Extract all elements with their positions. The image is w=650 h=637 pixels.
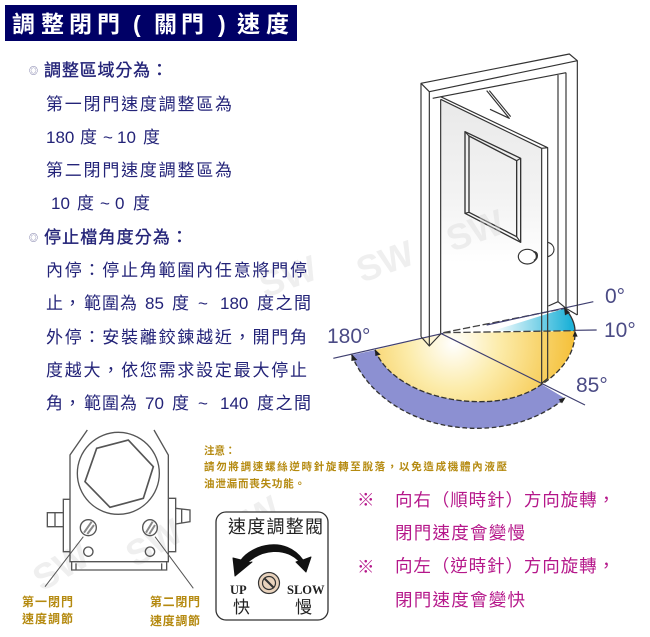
- caution note: [204, 444, 508, 490]
- direction notes: 向右（順時針）方向旋轉，: [395, 490, 615, 510]
- caution note: 請勿將調速螺絲逆時針旋轉至脫落，以免造成機體內液壓: [204, 460, 508, 473]
- direction notes: [357, 490, 615, 610]
- labels: adjusters: 速度調節: [22, 611, 73, 626]
- watermarks: SW: [26, 534, 96, 599]
- text block: stop angles: 度: [172, 294, 189, 313]
- text block: stop angles: 度之間: [257, 294, 312, 313]
- arrowheads: [351, 307, 578, 403]
- text block: adjustment zones: 度: [133, 194, 150, 213]
- direction notes: 閉門速度會變快: [395, 590, 525, 610]
- text block: adjustment zones: ~: [103, 128, 113, 147]
- speed valve panel: 快: [233, 598, 250, 617]
- door leaf shading: [441, 99, 542, 263]
- text block: stop angles: 內停：停止角範圍內任意將門停: [46, 261, 307, 280]
- labels: adjusters: 第一閉門: [22, 594, 73, 609]
- text block: stop angles: 外停：安裝離鉸鍊越近，開門角: [46, 328, 307, 347]
- speed valve panel: UP: [230, 583, 247, 597]
- closer arm: [487, 91, 511, 118]
- floor: purple outer arc: [352, 350, 565, 428]
- speed valve panel: [216, 512, 328, 620]
- text block: stop angles: 止: [46, 294, 63, 313]
- direction notes: 向左（逆時針）方向旋轉，: [395, 556, 615, 576]
- window: [465, 132, 521, 242]
- labels: adjusters: [22, 594, 200, 628]
- watermarks: SW: [351, 232, 419, 291]
- angle labels: 10°: [604, 319, 636, 342]
- knob: [518, 249, 536, 264]
- text block: adjustment zones: 180: [46, 128, 74, 147]
- text block: stop angles: 140: [220, 394, 248, 413]
- speed valve panel: SLOW: [287, 583, 325, 597]
- text block: stop angles: ◎: [29, 233, 38, 243]
- text block: adjustment zones: 10: [117, 128, 136, 147]
- text block: stop angles: ~: [198, 294, 208, 313]
- text block: stop angles: 停止檔角度分為：: [44, 228, 188, 247]
- text block: adjustment zones: ◎: [29, 66, 38, 76]
- icon: adjuster knob: [258, 572, 280, 594]
- door edges: [441, 97, 548, 383]
- floor: cyan closing sector: [493, 308, 575, 331]
- watermarks: [26, 201, 509, 599]
- text block: stop angles: 範圍為: [84, 394, 138, 413]
- direction notes: ※: [357, 557, 374, 577]
- text block: stop angles: [29, 228, 312, 413]
- arcs and angle lines: [352, 308, 575, 428]
- direction notes: 閉門速度會變慢: [395, 523, 526, 543]
- text block: stop angles: ~: [198, 394, 208, 413]
- angle labels: 0°: [605, 285, 625, 308]
- text block: adjustment zones: 度: [80, 128, 97, 147]
- speed valve panel: 慢: [295, 598, 312, 617]
- text block: adjustment zones: ~: [100, 194, 110, 213]
- text block: stop angles: 180: [220, 294, 248, 313]
- text block: stop angles: 70: [145, 394, 164, 413]
- text block: adjustment zones: 第一閉門速度調整區為: [46, 95, 232, 114]
- watermarks: SW: [216, 487, 287, 552]
- text block: stop angles: 度: [172, 394, 189, 413]
- text block: stop angles: 角: [46, 394, 63, 413]
- watermarks: SW: [441, 201, 509, 260]
- angle labels: 180°: [327, 325, 370, 348]
- text block: stop angles: 度之間: [257, 394, 312, 413]
- caution note: 注意：: [204, 444, 236, 457]
- text block: stop angles: 範圍為: [84, 294, 138, 313]
- text block: adjustment zones: 10: [51, 194, 70, 213]
- watermarks: SW: [118, 510, 189, 575]
- text block: adjustment zones: 調整區域分為：: [44, 61, 168, 80]
- frame: [421, 54, 577, 346]
- speed valve panel: 速度調整閥: [228, 517, 323, 537]
- text block: adjustment zones: 度: [143, 128, 160, 147]
- title banner: 調整閉門(關門)速度: [12, 11, 289, 37]
- watermarks: SW: [254, 247, 322, 306]
- labels: adjusters: 速度調節: [150, 613, 200, 628]
- title banner: [5, 5, 297, 41]
- floor: yellow swing area: [375, 331, 575, 402]
- door diagram: [333, 54, 597, 428]
- text block: adjustment zones: [29, 61, 232, 213]
- direction notes: ※: [357, 490, 374, 510]
- text block: stop angles: ，: [64, 294, 81, 313]
- icon: double arrow: [233, 545, 311, 576]
- text block: adjustment zones: 第二閉門速度調整區為: [46, 161, 232, 180]
- text block: stop angles: 度越大，依您需求設定最大停止: [46, 361, 307, 380]
- closer valve diagram: [45, 430, 193, 588]
- labels: adjusters: 第二閉門: [150, 594, 200, 609]
- caution note: 油泄漏而喪失功能。: [204, 477, 305, 490]
- text block: stop angles: ，: [64, 394, 81, 413]
- angle labels: [327, 285, 636, 397]
- text block: stop angles: 85: [145, 294, 164, 313]
- text block: adjustment zones: 度: [77, 194, 94, 213]
- text block: adjustment zones: 0: [115, 194, 124, 213]
- angle labels: 85°: [576, 374, 608, 397]
